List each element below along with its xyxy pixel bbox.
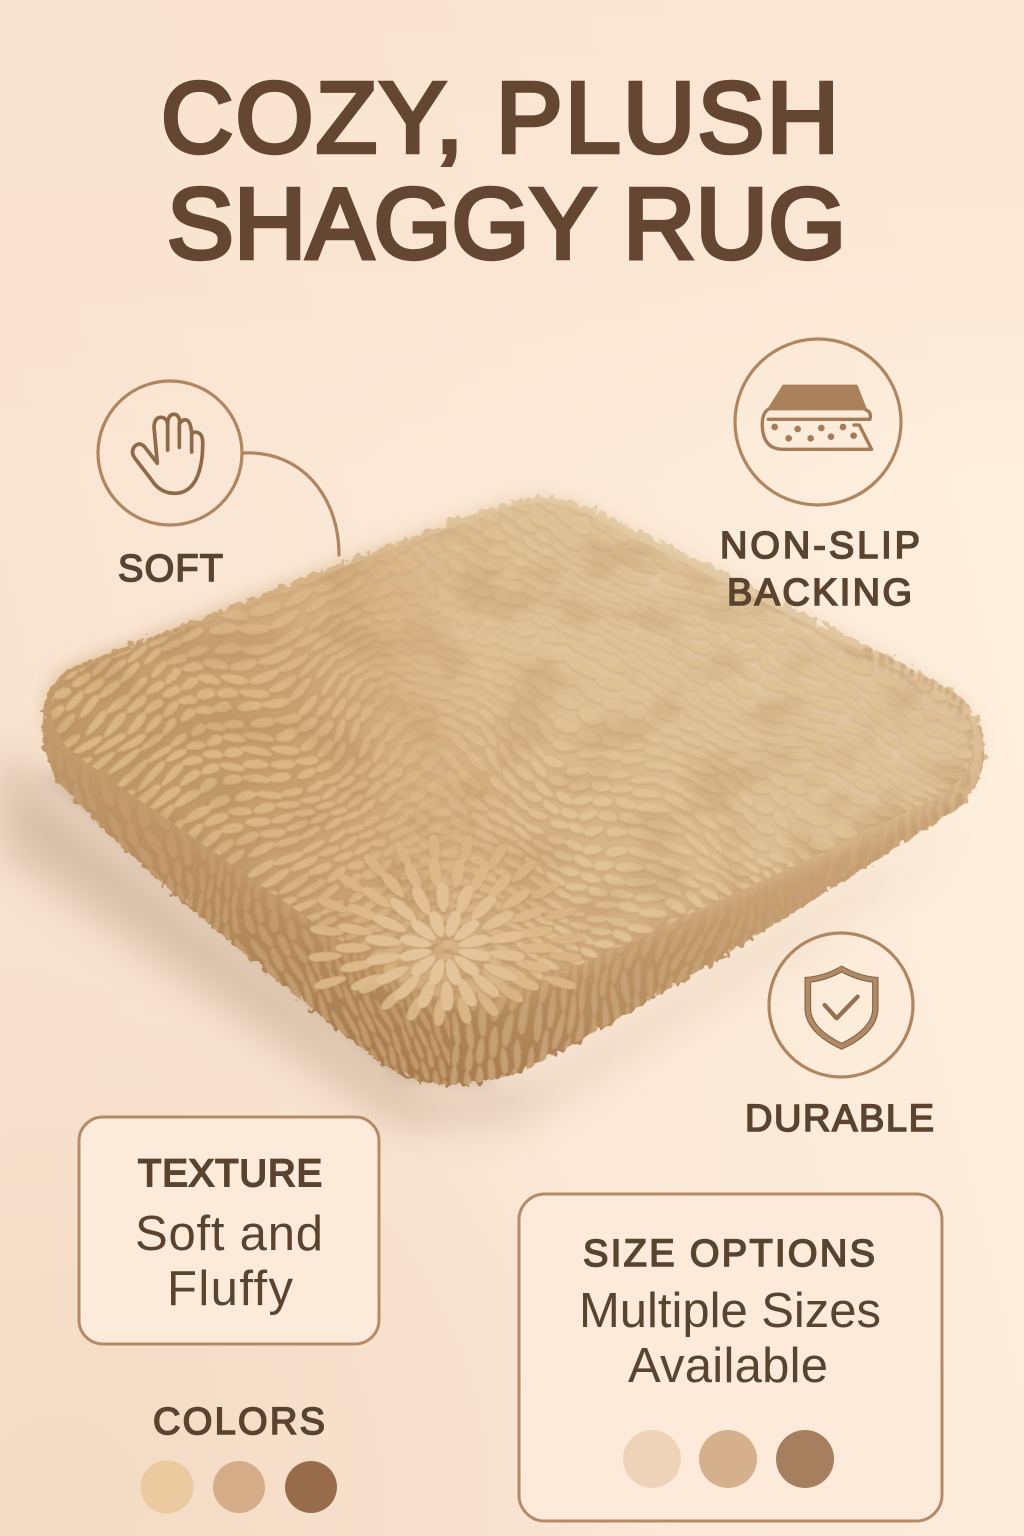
label: non-slip backing: NON-SLIP <box>720 525 920 567</box>
icon circle: durable <box>769 933 913 1077</box>
title: SHAGGY RUG <box>167 168 846 280</box>
icon circle: soft <box>98 381 242 525</box>
rug shadow <box>0 745 960 1125</box>
title: COZY, PLUSH <box>161 62 839 174</box>
title <box>161 62 846 280</box>
front corner tuft burst <box>308 834 584 1026</box>
icon circle: non-slip <box>735 339 901 505</box>
colors section <box>140 1401 337 1514</box>
texture heading: TEXTURE <box>138 1153 322 1195</box>
size options heading: SIZE OPTIONS <box>583 1233 875 1275</box>
size options description <box>579 1284 881 1393</box>
label: durable: DURABLE <box>745 1098 934 1140</box>
texture description: Fluffy <box>167 1262 294 1316</box>
callout: durable <box>745 933 934 1140</box>
panel: size options <box>519 1194 942 1521</box>
label: non-slip backing: BACKING <box>727 572 912 614</box>
label: soft: SOFT <box>118 548 223 590</box>
texture description: Soft and <box>135 1207 323 1261</box>
callout: soft <box>98 381 339 590</box>
size options description: Multiple Sizes <box>579 1284 881 1338</box>
icon: hand <box>132 414 203 493</box>
size swatches <box>623 1430 834 1488</box>
rug tone variation <box>208 584 672 764</box>
connector line <box>243 453 339 555</box>
callout: non-slip backing <box>720 339 920 614</box>
rug mottled patches <box>57 525 965 942</box>
rug silhouette <box>43 497 984 1085</box>
rug top strands <box>52 503 974 1000</box>
colors heading: COLORS <box>153 1401 325 1443</box>
color swatches <box>140 1460 337 1514</box>
size options description: Available <box>628 1339 828 1393</box>
rug top surface <box>51 503 974 1000</box>
rug side strands <box>0 640 1024 1100</box>
label: non-slip backing <box>720 525 920 614</box>
texture description <box>135 1207 323 1316</box>
icon: shield with check <box>805 966 878 1049</box>
icon: folded rug backing <box>762 386 872 449</box>
panel: texture <box>79 1117 379 1344</box>
shaggy rug <box>36 490 988 1088</box>
